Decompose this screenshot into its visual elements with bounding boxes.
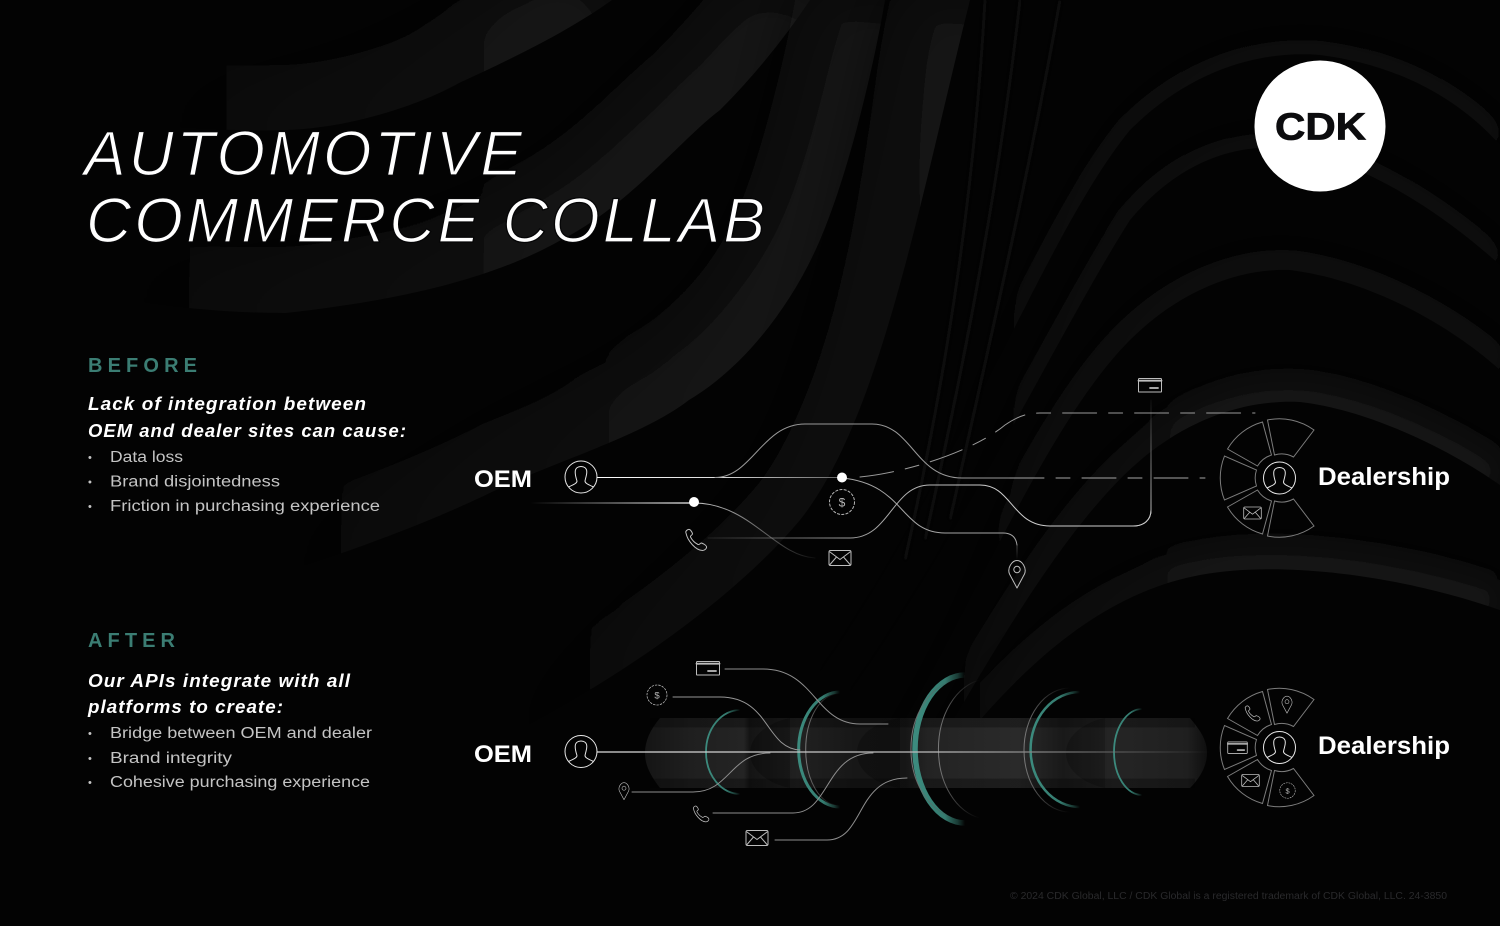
list: after benefits: •	[88, 777, 92, 789]
heading: after: AFTER	[88, 630, 176, 652]
list: before problems: •	[88, 452, 92, 464]
node: lower junction	[689, 497, 699, 507]
list: before problems	[88, 449, 380, 515]
icon: card before	[1138, 378, 1162, 392]
dealership wheel before	[1220, 419, 1314, 537]
subheading: before: OEM and dealer sites can cause:	[88, 421, 407, 441]
diagram: after	[474, 662, 1450, 846]
footer copyright: © 2024 CDK Global, LLC / CDK Global is a registered trademark of CDK Global, LLC. 24-3850	[1010, 891, 1447, 902]
logo: CDK white circle: CDK	[1275, 106, 1367, 148]
list: after benefits: •	[88, 753, 92, 765]
subheading: before: Lack of integration between	[88, 394, 367, 414]
list: after benefits: Bridge between OEM and dealer	[110, 725, 372, 742]
label: Dealership before: Dealership	[1318, 463, 1450, 491]
list: before problems: Data loss	[110, 449, 183, 466]
icon: phone before	[686, 529, 707, 550]
dealership wheel after	[1220, 688, 1314, 807]
icon: OEM person before	[565, 461, 597, 493]
list: after benefits: Cohesive purchasing experience	[110, 774, 370, 791]
background: dark flowing waves	[258, 0, 1500, 686]
list: before problems: Brand disjointedness	[110, 474, 280, 490]
icon: mail after	[746, 830, 768, 846]
list: before problems: Friction in purchasing experience	[110, 498, 380, 515]
icon: pin after	[619, 783, 629, 800]
panel: before text	[88, 355, 407, 515]
subheading: after: Our APIs integrate with all	[88, 671, 351, 691]
icon: location pin before	[1009, 560, 1025, 588]
icon: OEM person after	[565, 736, 597, 768]
icon: phone after	[693, 806, 709, 822]
title	[80, 119, 768, 256]
tube: unified integration pipe	[645, 718, 1207, 788]
rings: teal and gray arcs on tube	[706, 675, 1142, 823]
title: COMMERCE COLLAB	[86, 186, 768, 256]
title: AUTOMOTIVE	[80, 119, 525, 189]
list: before problems: •	[88, 501, 92, 513]
node: upper junction	[837, 472, 847, 482]
label: Dealership after: Dealership	[1318, 732, 1450, 760]
list: after benefits: Brand integrity	[110, 750, 232, 767]
label: OEM after: OEM	[474, 741, 532, 768]
icon: mail before	[829, 550, 851, 566]
connection lines after	[597, 669, 1210, 840]
list: after benefits	[88, 725, 372, 791]
list: before problems: •	[88, 476, 92, 488]
logo: CDK white circle	[1254, 60, 1386, 192]
heading: before: BEFORE	[88, 355, 197, 377]
panel: after text	[87, 630, 372, 791]
icon: dollar after	[647, 685, 667, 705]
icon: card after	[696, 662, 720, 675]
connection lines before	[530, 400, 1255, 562]
list: after benefits: •	[88, 728, 92, 740]
icon: dollar before	[830, 490, 854, 514]
subheading: after	[87, 671, 351, 717]
subheading: after: platforms to create:	[87, 697, 284, 717]
diagram: before	[474, 378, 1450, 588]
subheading: before	[88, 394, 407, 441]
label: OEM before: OEM	[474, 466, 532, 493]
